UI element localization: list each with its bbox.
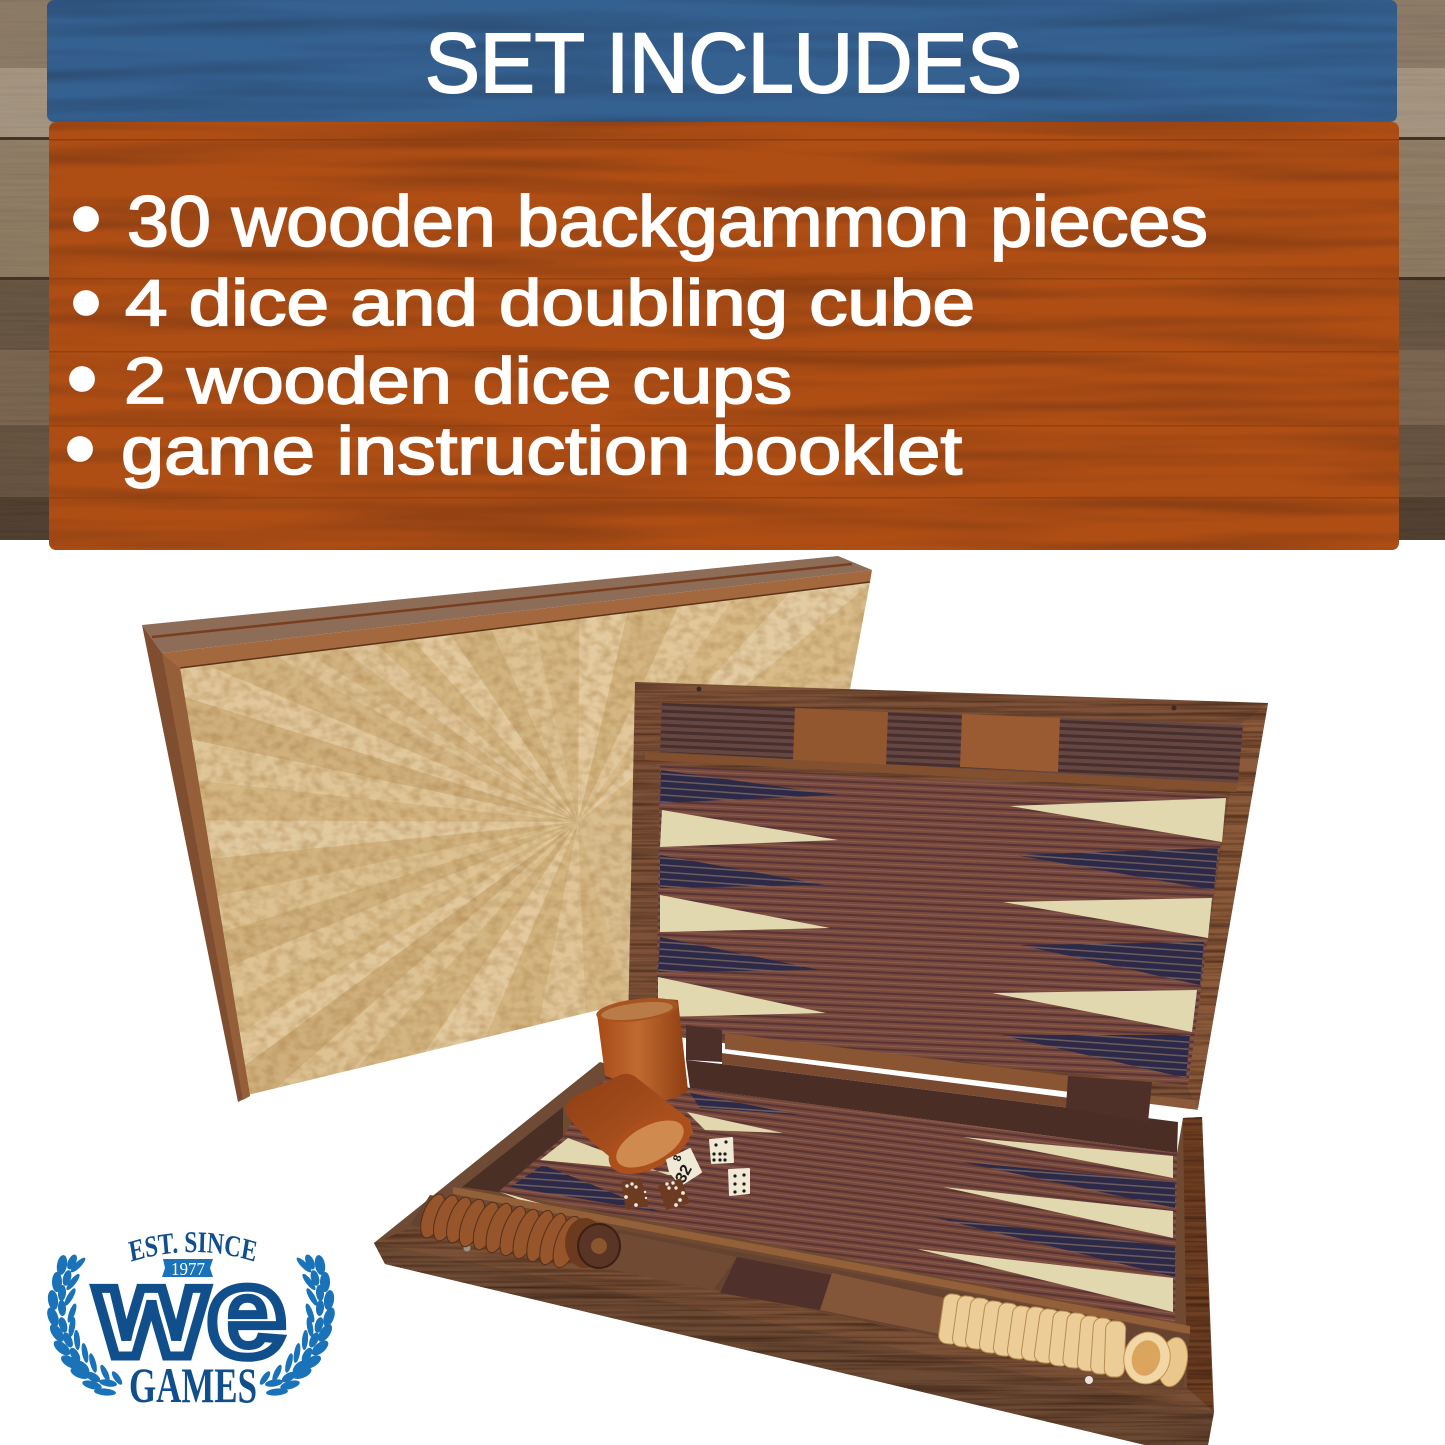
- open board: upper half: [628, 682, 1268, 1108]
- ivory doubling cube: 32: [673, 1162, 696, 1186]
- divider rail: [453, 1187, 1190, 1334]
- blue heading banner: [47, 0, 1397, 122]
- est. since arc text: EST. SINCE: [128, 1232, 256, 1262]
- left wall: [462, 1107, 563, 1192]
- open board: lower half: [374, 686, 1214, 1445]
- hinge felt and centre gap: [686, 1025, 1198, 1153]
- brown die: [660, 1180, 688, 1208]
- tipped dice cup: [565, 1074, 701, 1186]
- we wordmark: we: [95, 1241, 286, 1384]
- light wooden checkers: [938, 1293, 1192, 1389]
- ivory doubling cube: [667, 1149, 701, 1186]
- ivory die: [710, 1138, 733, 1163]
- list item: booklet: game instruction booklet: [121, 413, 962, 489]
- list item: cups: 2 wooden dice cups: [124, 344, 792, 417]
- laurel left: [45, 1253, 124, 1396]
- upper playing field: [656, 765, 1227, 1085]
- navy points lower: [510, 1093, 1175, 1277]
- lower frame: [374, 1062, 1214, 1445]
- front rim: [374, 1228, 1214, 1412]
- heading: set includes: SET INCLUDES: [425, 16, 1022, 110]
- left rim: [374, 1062, 606, 1243]
- games wordmark: GAMES: [129, 1357, 257, 1413]
- orange panel: contents list: [49, 122, 1399, 550]
- upper storage compartment: [660, 703, 1243, 783]
- navy points upper right: [1000, 848, 1218, 1078]
- right wood side: [1183, 1117, 1213, 1412]
- brown die: [623, 1180, 647, 1208]
- dark wooden checkers: [416, 1191, 620, 1271]
- laurel right: [258, 1253, 337, 1396]
- upright dice cup: [595, 994, 688, 1100]
- cream points upper right: [992, 798, 1226, 1032]
- cream points upper left: [658, 810, 838, 1017]
- closed board: oak back: [142, 556, 872, 1102]
- front face: [374, 1243, 1214, 1445]
- lower playing field: [498, 1075, 1177, 1322]
- upper frame: [628, 682, 1268, 1108]
- list item: pieces: 30 wooden backgammon pieces: [127, 183, 1208, 262]
- lower tray well: [410, 1195, 1190, 1388]
- logo: WE Games: [47, 1232, 335, 1413]
- cream points lower: [500, 1112, 1173, 1312]
- wood plank background: [0, 0, 1445, 540]
- list item: dice: 4 dice and doubling cube: [125, 266, 975, 339]
- navy points upper left: [658, 770, 838, 972]
- walnut frame: [142, 556, 872, 1102]
- oak sunburst veneer: [180, 582, 870, 1094]
- ivory die: [729, 1169, 749, 1195]
- 1977 ribbon: 1977: [171, 1259, 205, 1279]
- ivory doubling cube: 8: [671, 1154, 684, 1163]
- centre troughs: [600, 1233, 737, 1290]
- pins: [464, 1244, 470, 1252]
